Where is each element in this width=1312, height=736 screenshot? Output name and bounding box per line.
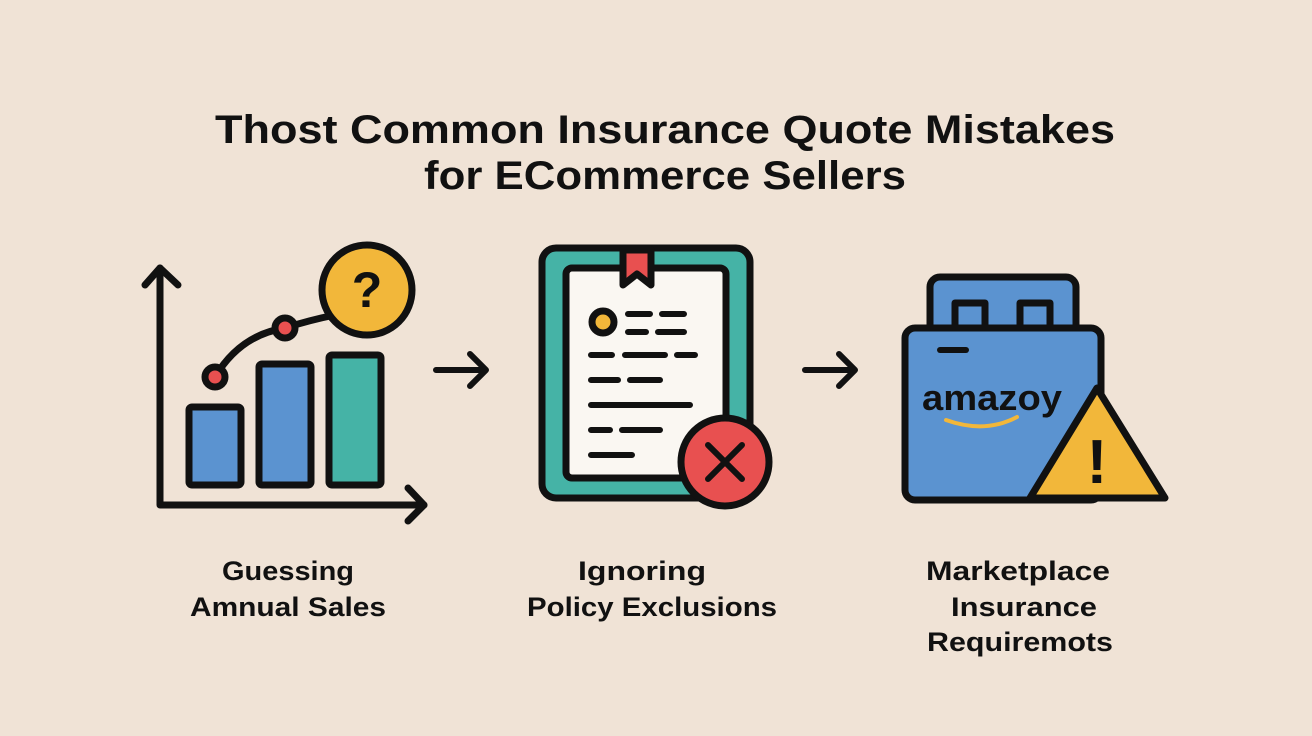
icon: exclamation: ! [1087,428,1107,497]
title: for ECommerce Sellers [424,154,906,198]
label 3 [926,556,1113,657]
label 3: Requiremots [927,627,1113,657]
title [215,108,1115,198]
label 1: Guessing [222,556,354,586]
arrow 2 [805,354,855,386]
title: Thost Common Insurance Quote Mistakes [215,108,1115,152]
label 1: Amnual Sales [190,592,386,622]
icon: sales chart with question [145,245,424,521]
icon: marketplace bag with warning [905,277,1165,500]
label 3: Insurance [951,592,1097,622]
icon: question mark: ? [352,262,382,318]
label 2 [527,556,777,622]
icon: amazoy brand text: amazoy [922,377,1062,418]
label 2: Policy Exclusions [527,592,777,622]
icon: policy document with exclusion [542,248,769,506]
label 1 [190,556,386,622]
label 2: Ignoring [578,556,706,586]
label 3: Marketplace [926,556,1110,586]
arrow 1 [436,354,486,386]
